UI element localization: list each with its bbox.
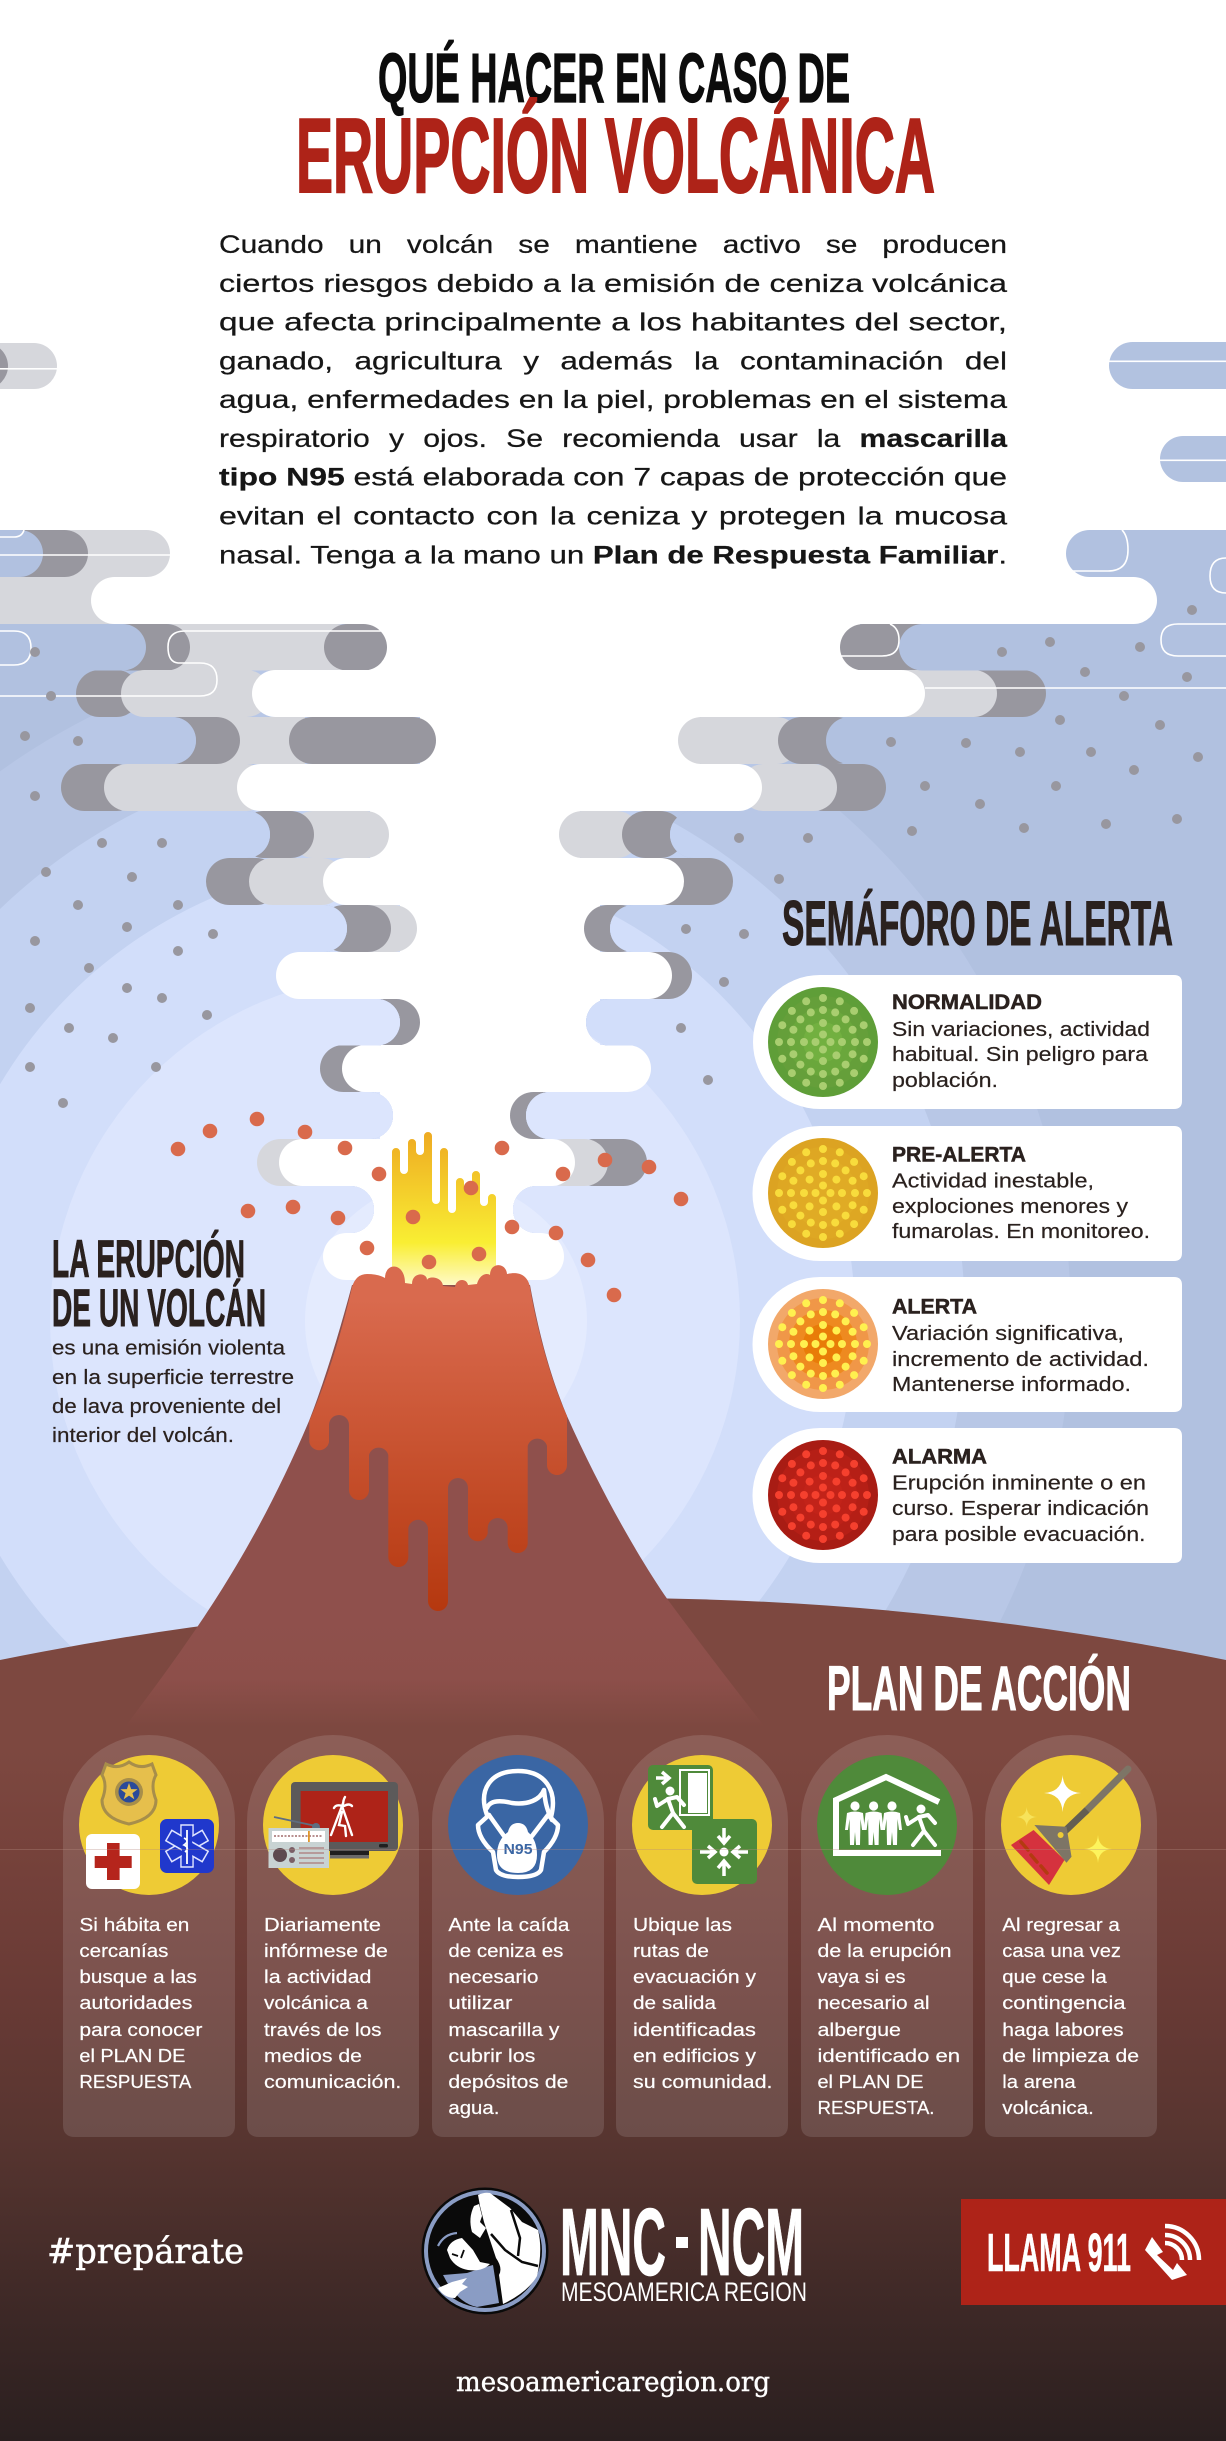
text: rutas de evacuación: Ubique las [633, 1914, 732, 1935]
heading: la erupción de un volcán: LA ERUPCIÓN [52, 1229, 245, 1289]
icon: phone [1145, 2226, 1199, 2280]
text: albergue: de la erupción [818, 1940, 952, 1961]
ash particles [20, 605, 1203, 1108]
sky background with concentric rings [0, 530, 1226, 1996]
panel: pre-alerta: PRE-ALERTA [892, 1144, 1026, 1167]
icon: radio [268, 1817, 329, 1868]
panel: alerta [752, 1277, 1182, 1412]
fire column [392, 1132, 496, 1290]
panel: pre-alerta [752, 1126, 1182, 1261]
panel: alerta: ALERTA [892, 1296, 977, 1318]
text: albergue: Al momento [818, 1914, 934, 1935]
panel: normalidad: NORMALIDAD [892, 991, 1042, 1014]
text: medios: través de los [264, 2019, 382, 2040]
text: rutas de evacuación: en edificios y [633, 2045, 757, 2066]
panel: alarma: para posible evacuación. [892, 1523, 1146, 1546]
lava bombs [171, 1112, 688, 1302]
panel: alarma [752, 1428, 1182, 1563]
logo emblem [422, 2188, 548, 2314]
ground hill [0, 1598, 1226, 2441]
lava flow [309, 1265, 567, 1611]
intro paragraph [219, 231, 1008, 569]
ash cloud plume [0, 530, 1226, 1280]
panel: normalidad [753, 975, 1182, 1109]
text: albergue: el PLAN DE [818, 2071, 924, 2092]
text: rutas de evacuación: evacuación y [633, 1966, 757, 1987]
text: albergue [818, 1914, 960, 2118]
text: rutas de evacuación [633, 1914, 772, 2092]
text: autoridades: Si hábita en [79, 1914, 189, 1935]
text: mascarilla: utilizar [448, 1992, 512, 2013]
panel: pre-alerta: explociones menores y [892, 1195, 1129, 1218]
infographic: NCM [698, 2189, 804, 2296]
text: albergue: necesario al [818, 1992, 930, 2013]
icon: exit sign [648, 1765, 713, 1830]
icon: assembly point sign [692, 1819, 757, 1884]
text: medios: volcánica a [264, 1992, 369, 2013]
text: limpieza: contingencia [1002, 1992, 1126, 2013]
logo wordmark: MESOAMERICA REGION [561, 2277, 807, 2307]
text: mascarilla: mascarilla y [448, 2019, 560, 2040]
icon: television [291, 1782, 398, 1858]
title [296, 39, 935, 215]
icon: N95 mask [478, 1771, 558, 1877]
panel: pre-alerta: Actividad inestable, [892, 1169, 1094, 1192]
intro paragraph: ciertos riesgos debido a la emisión de ceniza volcánica [219, 270, 1007, 298]
plan card 6: limpieza [985, 1735, 1157, 2137]
text: rutas de evacuación: su comunidad. [633, 2071, 772, 2092]
panel: alerta: Variación significativa, [892, 1322, 1124, 1345]
text: medios [264, 1914, 401, 2092]
text: limpieza: haga labores [1002, 2019, 1124, 2040]
text: autoridades: busque a las [79, 1966, 197, 1987]
intro paragraph: respiratorio y ojos. Se recomienda usar la mascarilla [219, 425, 1008, 453]
panel: alarma: curso. Esperar indicación [892, 1497, 1149, 1520]
logo wordmark: MNC [560, 2189, 666, 2296]
hashtag: #prepárate [47, 2232, 244, 2272]
heading: la erupción de un volcán: DE UN VOLCÁN [52, 1278, 266, 1338]
intro paragraph: agua, enfermedades en la piel, problemas en el sistema [219, 386, 1007, 414]
plan card 5: albergue [801, 1735, 973, 2137]
text: albergue: albergue [818, 2019, 901, 2040]
text: albergue: identificado en [818, 2045, 960, 2066]
text: autoridades: para conocer [79, 2019, 202, 2040]
text: definition of eruption: de lava proveniente del [52, 1396, 281, 1418]
volcano cone [125, 1285, 765, 1727]
intro paragraph: ganado, agricultura y además la contaminación del [219, 347, 1007, 375]
text: medios: la actividad [264, 1966, 372, 1987]
text: autoridades: RESPUESTA [79, 2071, 192, 2092]
panel: alerta: incremento de actividad. [892, 1348, 1149, 1371]
sky pills overlapping the plume [0, 530, 1226, 1233]
icon: police badge [102, 1762, 156, 1824]
intro paragraph: que afecta principalmente a los habitantes del sector, [219, 309, 1007, 337]
website url: mesoamericaregion.org [456, 2367, 770, 2398]
icon: star of life [160, 1819, 214, 1873]
text: definition of eruption: interior del volcán. [52, 1425, 234, 1447]
text: rutas de evacuación: identificadas [633, 2019, 756, 2040]
panel: normalidad: habitual. Sin peligro para [892, 1043, 1149, 1066]
text: limpieza: de limpieza de [1002, 2045, 1139, 2066]
icon: shelter [836, 1777, 941, 1853]
icon: red cross [86, 1834, 140, 1889]
text: limpieza [1002, 1914, 1139, 2118]
icon: broom and sparkles [1011, 1769, 1128, 1885]
panel: alarma: ALARMA [892, 1446, 987, 1469]
panel: pre-alerta: fumarolas. En monitoreo. [892, 1220, 1150, 1243]
text: autoridades [79, 1914, 202, 2092]
text: mascarilla: depósitos de [448, 2071, 568, 2092]
text: rutas de evacuación: de salida [633, 1992, 717, 2013]
intro paragraph: tipo N95 está elaborada con 7 capas de protección que [219, 464, 1007, 492]
text: limpieza: volcánica. [1002, 2097, 1094, 2118]
heading: la erupción de un volcán [52, 1229, 266, 1338]
text: albergue: RESPUESTA. [818, 2097, 934, 2118]
text: mascarilla: necesario [448, 1966, 538, 1987]
upper side clouds [0, 342, 1226, 482]
text: mascarilla: Ante la caída [448, 1914, 570, 1935]
text: mascarilla: de ceniza es [448, 1940, 563, 1961]
panel: alarma: Erupción inminente o en [892, 1472, 1146, 1495]
intro paragraph: evitan el contacto con la ceniza y protegen la mucosa [219, 502, 1007, 530]
panel: alerta: Mantenerse informado. [892, 1373, 1131, 1396]
intro paragraph: nasal. Tenga a la mano un Plan de Respuesta Familiar . [219, 541, 1007, 569]
text: medios: comunicación. [264, 2071, 401, 2092]
icon: N95 mask: N95 [504, 1841, 532, 1858]
text: mascarilla: agua. [448, 2097, 499, 2118]
panel: normalidad: Sin variaciones, actividad [892, 1018, 1150, 1041]
plan card 1: autoridades [63, 1735, 235, 2137]
text: albergue: vaya si es [818, 1966, 906, 1987]
text: definition of eruption: en la superficie terrestre [52, 1367, 294, 1389]
text: mascarilla [448, 1914, 570, 2118]
text: mascarilla: cubrir los [448, 2045, 535, 2066]
plan card 4: rutas de evacuación [616, 1735, 788, 2137]
text: limpieza: Al regresar a [1002, 1914, 1121, 1935]
intro paragraph: Cuando un volcán se mantiene activo se producen [219, 231, 1007, 259]
text: autoridades: cercanías [79, 1940, 168, 1961]
text: definition of eruption [52, 1338, 294, 1447]
text: limpieza: la arena [1002, 2071, 1076, 2092]
text: autoridades: el PLAN DE [79, 2045, 185, 2066]
text: medios: Diariamente [264, 1914, 381, 1935]
panel: normalidad: población. [892, 1069, 998, 1092]
text: limpieza: que cese la [1002, 1966, 1107, 1987]
text: medios: medios de [264, 2045, 362, 2066]
text: limpieza: casa una vez [1002, 1940, 1121, 1961]
plan card 2: medios [247, 1735, 419, 2137]
text: rutas de evacuación: rutas de [633, 1940, 709, 1961]
cloud outlines [0, 530, 1226, 696]
text: medios: infórmese de [264, 1940, 388, 1961]
text: autoridades: autoridades [79, 1992, 192, 2013]
text: definition of eruption: es una emisión violenta [52, 1338, 286, 1360]
call box: llama 911 [961, 2199, 1226, 2305]
plan card 3: mascarilla [432, 1735, 604, 2137]
